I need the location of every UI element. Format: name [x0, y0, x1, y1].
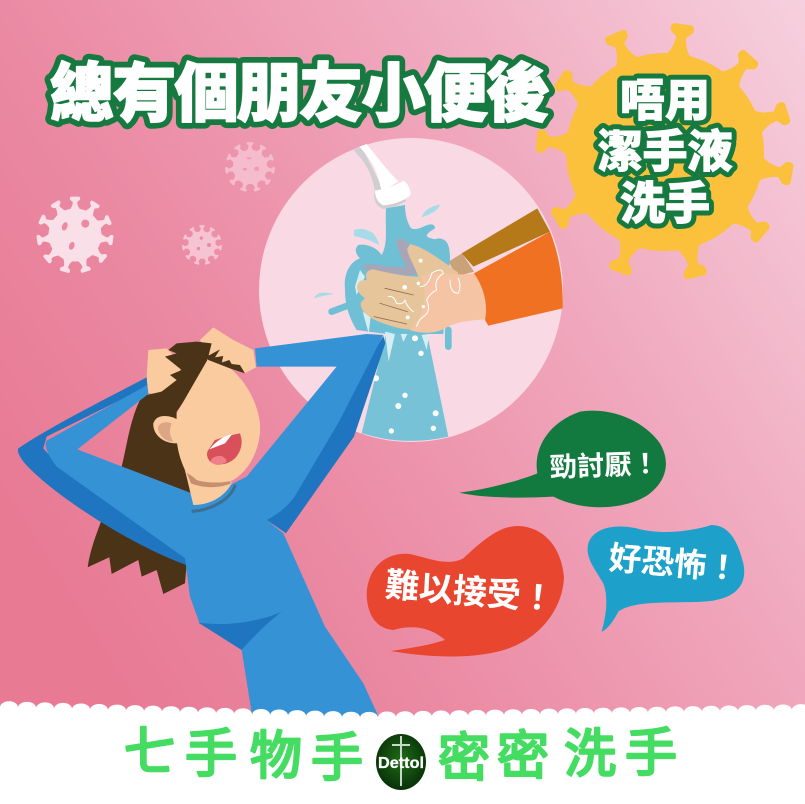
head — [177, 358, 260, 482]
yellow callout text: 潔手液 — [597, 115, 733, 180]
sleeve cuff — [462, 208, 550, 267]
soap lather — [388, 270, 460, 327]
bubble text: 好恐怖！ — [607, 532, 741, 590]
speech bubble: blue — [588, 525, 744, 632]
finger lines — [374, 288, 413, 324]
slogan: 密 — [497, 714, 549, 789]
left arm shadow — [18, 377, 187, 565]
fringe — [207, 349, 245, 373]
bubble text: 勁討厭！ — [549, 441, 660, 485]
torso and arms — [46, 334, 383, 723]
title: 總有個朋友小便後 — [50, 43, 550, 135]
slogan: 手 — [625, 711, 677, 786]
yellow callout text: 洗手 — [620, 167, 710, 232]
slogan — [124, 710, 677, 791]
belly shadow — [198, 612, 282, 650]
back hand — [357, 244, 458, 329]
icon: small virus — [182, 225, 222, 265]
yellow callout text: 唔用 — [620, 64, 710, 129]
panel: hand washing circle — [259, 138, 563, 442]
bubble text: 難以接受！ — [383, 557, 557, 621]
icon: yellow virus — [535, 21, 796, 282]
slogan: 洗 — [564, 712, 616, 787]
yellow callout text: 唔用 — [620, 64, 710, 129]
right arm shadow — [267, 336, 385, 533]
speech bubble: green — [459, 411, 666, 507]
sleeve — [474, 232, 563, 326]
ear — [153, 416, 178, 443]
water splash — [345, 205, 450, 334]
slogan: 手 — [311, 716, 363, 791]
front hand — [410, 273, 487, 333]
slogan: 密 — [438, 716, 490, 791]
soap bubbles — [402, 259, 425, 319]
wrist back — [449, 253, 474, 277]
left hand — [147, 348, 182, 394]
icon: Dettol logo — [376, 734, 426, 790]
illustration: upset woman — [18, 327, 385, 723]
footer: scalloped white band — [0, 701, 805, 804]
yellow callout text: 洗手 — [620, 167, 710, 232]
droplets — [314, 205, 440, 298]
neck — [185, 470, 232, 505]
water stream — [362, 332, 448, 441]
mouth — [207, 433, 242, 465]
shadow — [363, 238, 423, 275]
right hand — [200, 327, 256, 373]
slogan: 物 — [250, 714, 302, 789]
faucet — [353, 144, 411, 209]
collar — [192, 485, 235, 511]
title: 總有個朋友小便後 — [50, 43, 550, 135]
speech bubble: red — [367, 526, 564, 656]
yellow callout text — [597, 64, 733, 232]
neck shadow — [187, 473, 231, 487]
yellow callout text: 潔手液 — [597, 115, 733, 180]
water bubbles — [373, 335, 439, 434]
hair — [122, 342, 212, 493]
drips — [355, 270, 429, 362]
slogan: 手 — [185, 712, 237, 787]
illustration: washing hands — [314, 144, 563, 441]
slogan: 七 — [124, 710, 176, 785]
icon: faint virus top — [225, 142, 275, 192]
hair lower — [88, 507, 192, 594]
icon: Dettol logo: Dettol — [378, 755, 424, 772]
icon: large white virus — [36, 197, 114, 273]
